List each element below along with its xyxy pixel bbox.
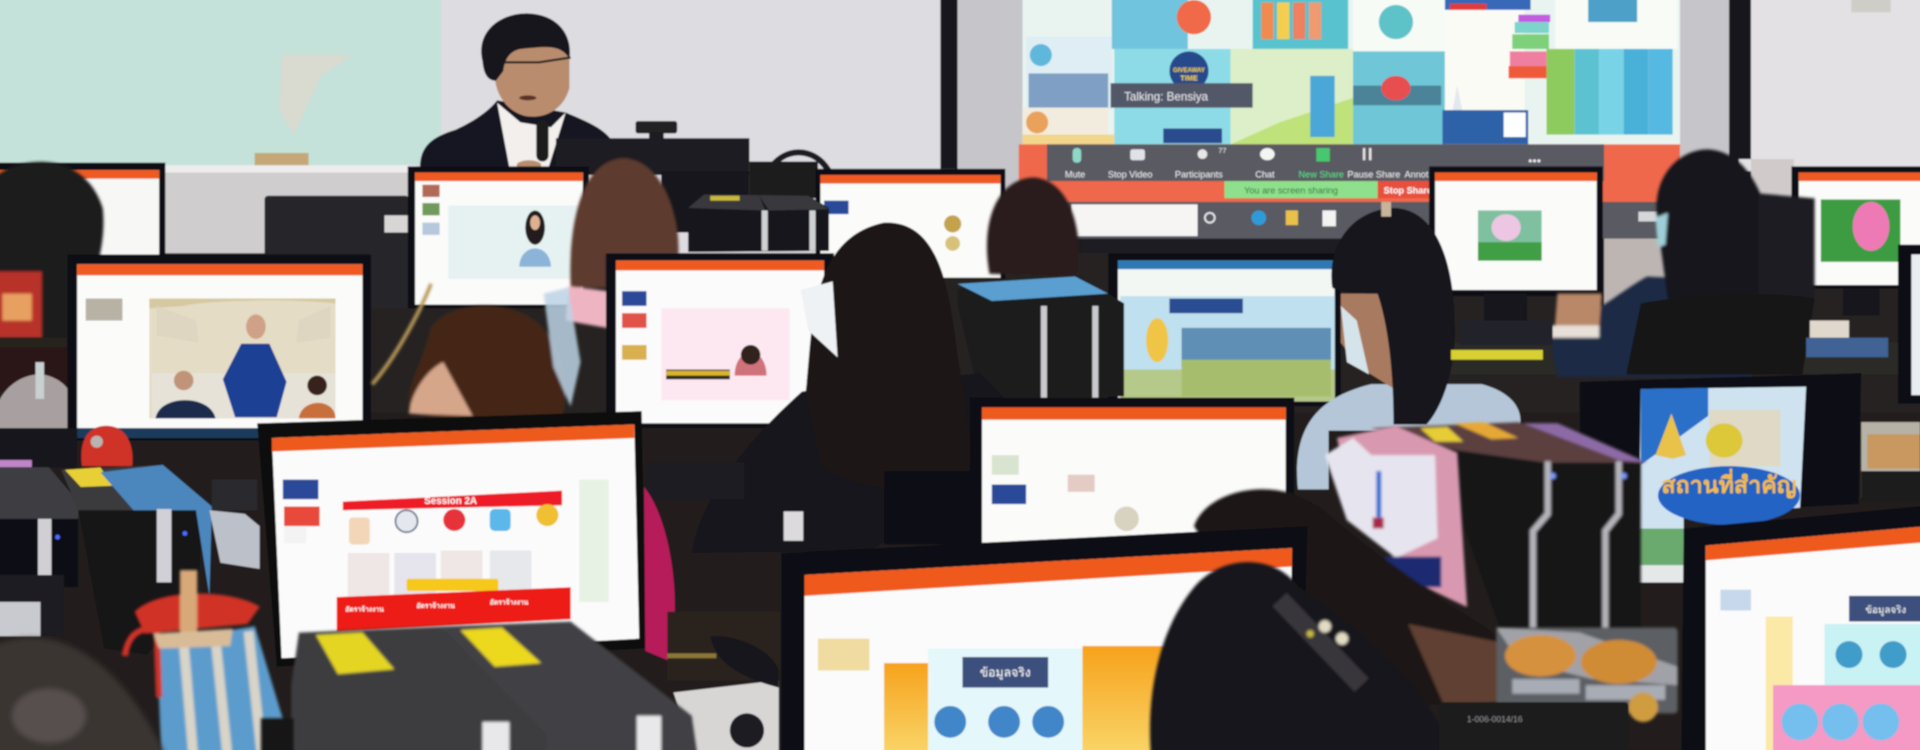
black computer on rear desk bbox=[688, 195, 829, 252]
zoom toolbar bbox=[1047, 144, 1604, 181]
talking label: Talking: Bensiya bbox=[1124, 90, 1209, 103]
black box lower right: 1-006-0014/16 bbox=[1467, 714, 1523, 724]
centre desk bottom bbox=[667, 612, 780, 750]
monitor: temple slide bbox=[1580, 373, 1861, 582]
pink plastic bag bbox=[1325, 426, 1467, 607]
pink sleeve bbox=[644, 487, 675, 661]
student: right with navy jacket bbox=[1549, 149, 1785, 377]
red slide footer bbox=[1019, 144, 1680, 206]
student: brown hair back bbox=[566, 158, 679, 328]
black computers right bbox=[1371, 422, 1647, 633]
monitor: city collage slide bbox=[1108, 253, 1341, 406]
monitor: infographic slide: อัตราจ้างงาน bbox=[345, 605, 384, 614]
foreground student with hair clip bbox=[1150, 562, 1451, 750]
projected slide collage: GIVEAWAY bbox=[1173, 67, 1205, 74]
left desk clutter: cups and floral chair bbox=[0, 338, 78, 428]
monitor: infographic slide: อัตราจ้างงาน bbox=[416, 601, 455, 610]
monitor: far right lotus bbox=[1791, 166, 1920, 316]
rear desk band and lower wall bbox=[0, 159, 1920, 412]
monitor: front centre bbox=[781, 526, 1308, 750]
zoom toolbar: 77 bbox=[1218, 146, 1227, 155]
student: short black hair bbox=[987, 177, 1079, 277]
monitor: flight attendant slide bbox=[67, 254, 371, 440]
woman long black hair centre bbox=[647, 223, 1004, 553]
grey computers foreground bbox=[261, 622, 698, 750]
projection screen bbox=[940, 0, 1751, 253]
projected slide collage bbox=[1022, 0, 1680, 147]
student: left edge bbox=[0, 162, 104, 343]
woman ponytail blue shirt bbox=[1297, 202, 1520, 489]
right desk with keyboard and items bbox=[1451, 321, 1920, 502]
monitor: portrait slide bbox=[408, 166, 589, 308]
zoom toolbar: New Share bbox=[1299, 169, 1344, 179]
whiteboard bbox=[0, 0, 441, 173]
screen sharing banner bbox=[1224, 181, 1433, 198]
chair at right bbox=[1626, 294, 1815, 374]
muffins in plastic boxes bbox=[1496, 628, 1678, 722]
rear equipment and podium bbox=[264, 121, 835, 308]
monitor: front centre: ข้อมูลจริง bbox=[980, 666, 1031, 681]
woman brown hair mid left bbox=[372, 284, 580, 422]
blurred foreground head bbox=[0, 638, 167, 750]
monitor: infographic slide bbox=[257, 411, 647, 667]
monitor: centre banner slide bbox=[606, 253, 834, 428]
monitor: infographic slide: Session 2A bbox=[424, 496, 477, 507]
zoom toolbar: ••• bbox=[1528, 154, 1541, 168]
red safety helmet bbox=[0, 426, 133, 467]
presenter bbox=[420, 13, 612, 170]
zoom toolbar: Pause Share bbox=[1347, 169, 1400, 179]
striped tote bag bbox=[125, 570, 283, 750]
monitor: slide behind ponytail bbox=[970, 398, 1294, 547]
zoom toolbar: Stop Video bbox=[1108, 169, 1153, 179]
back row students bbox=[0, 149, 1815, 377]
screen sharing banner: Stop Share bbox=[1384, 185, 1432, 195]
projected slide collage: TIME bbox=[1180, 74, 1198, 83]
computer behind right student bbox=[1758, 193, 1815, 300]
black box lower right bbox=[1439, 702, 1629, 750]
monitor: lotus slide bbox=[1429, 166, 1603, 324]
back row monitors bbox=[0, 163, 1920, 404]
thai title: สถานที่สำคัญ bbox=[1661, 468, 1797, 499]
left black computers bbox=[0, 465, 260, 655]
zoom toolbar: Participants bbox=[1175, 169, 1223, 179]
monitor: front right bbox=[1681, 505, 1920, 750]
monitor: infographic slide: อัตราจ้างงาน bbox=[490, 597, 529, 606]
monitor: edge right bbox=[1898, 245, 1920, 404]
screen sharing banner: You are screen sharing bbox=[1244, 185, 1338, 195]
windows taskbar bbox=[1065, 202, 1678, 239]
front right seated student hair bbox=[1194, 489, 1522, 707]
black computers behind centre bbox=[958, 277, 1124, 398]
talking label bbox=[1111, 83, 1253, 108]
monitor: back centre bbox=[816, 169, 1005, 279]
zoom toolbar: Mute bbox=[1065, 169, 1085, 179]
zoom toolbar: Chat bbox=[1255, 169, 1275, 179]
zoom toolbar: Annotate bbox=[1405, 169, 1441, 179]
monitor: front right: ข้อมูลจริง bbox=[1865, 605, 1906, 616]
monitor: far left back bbox=[0, 163, 165, 258]
